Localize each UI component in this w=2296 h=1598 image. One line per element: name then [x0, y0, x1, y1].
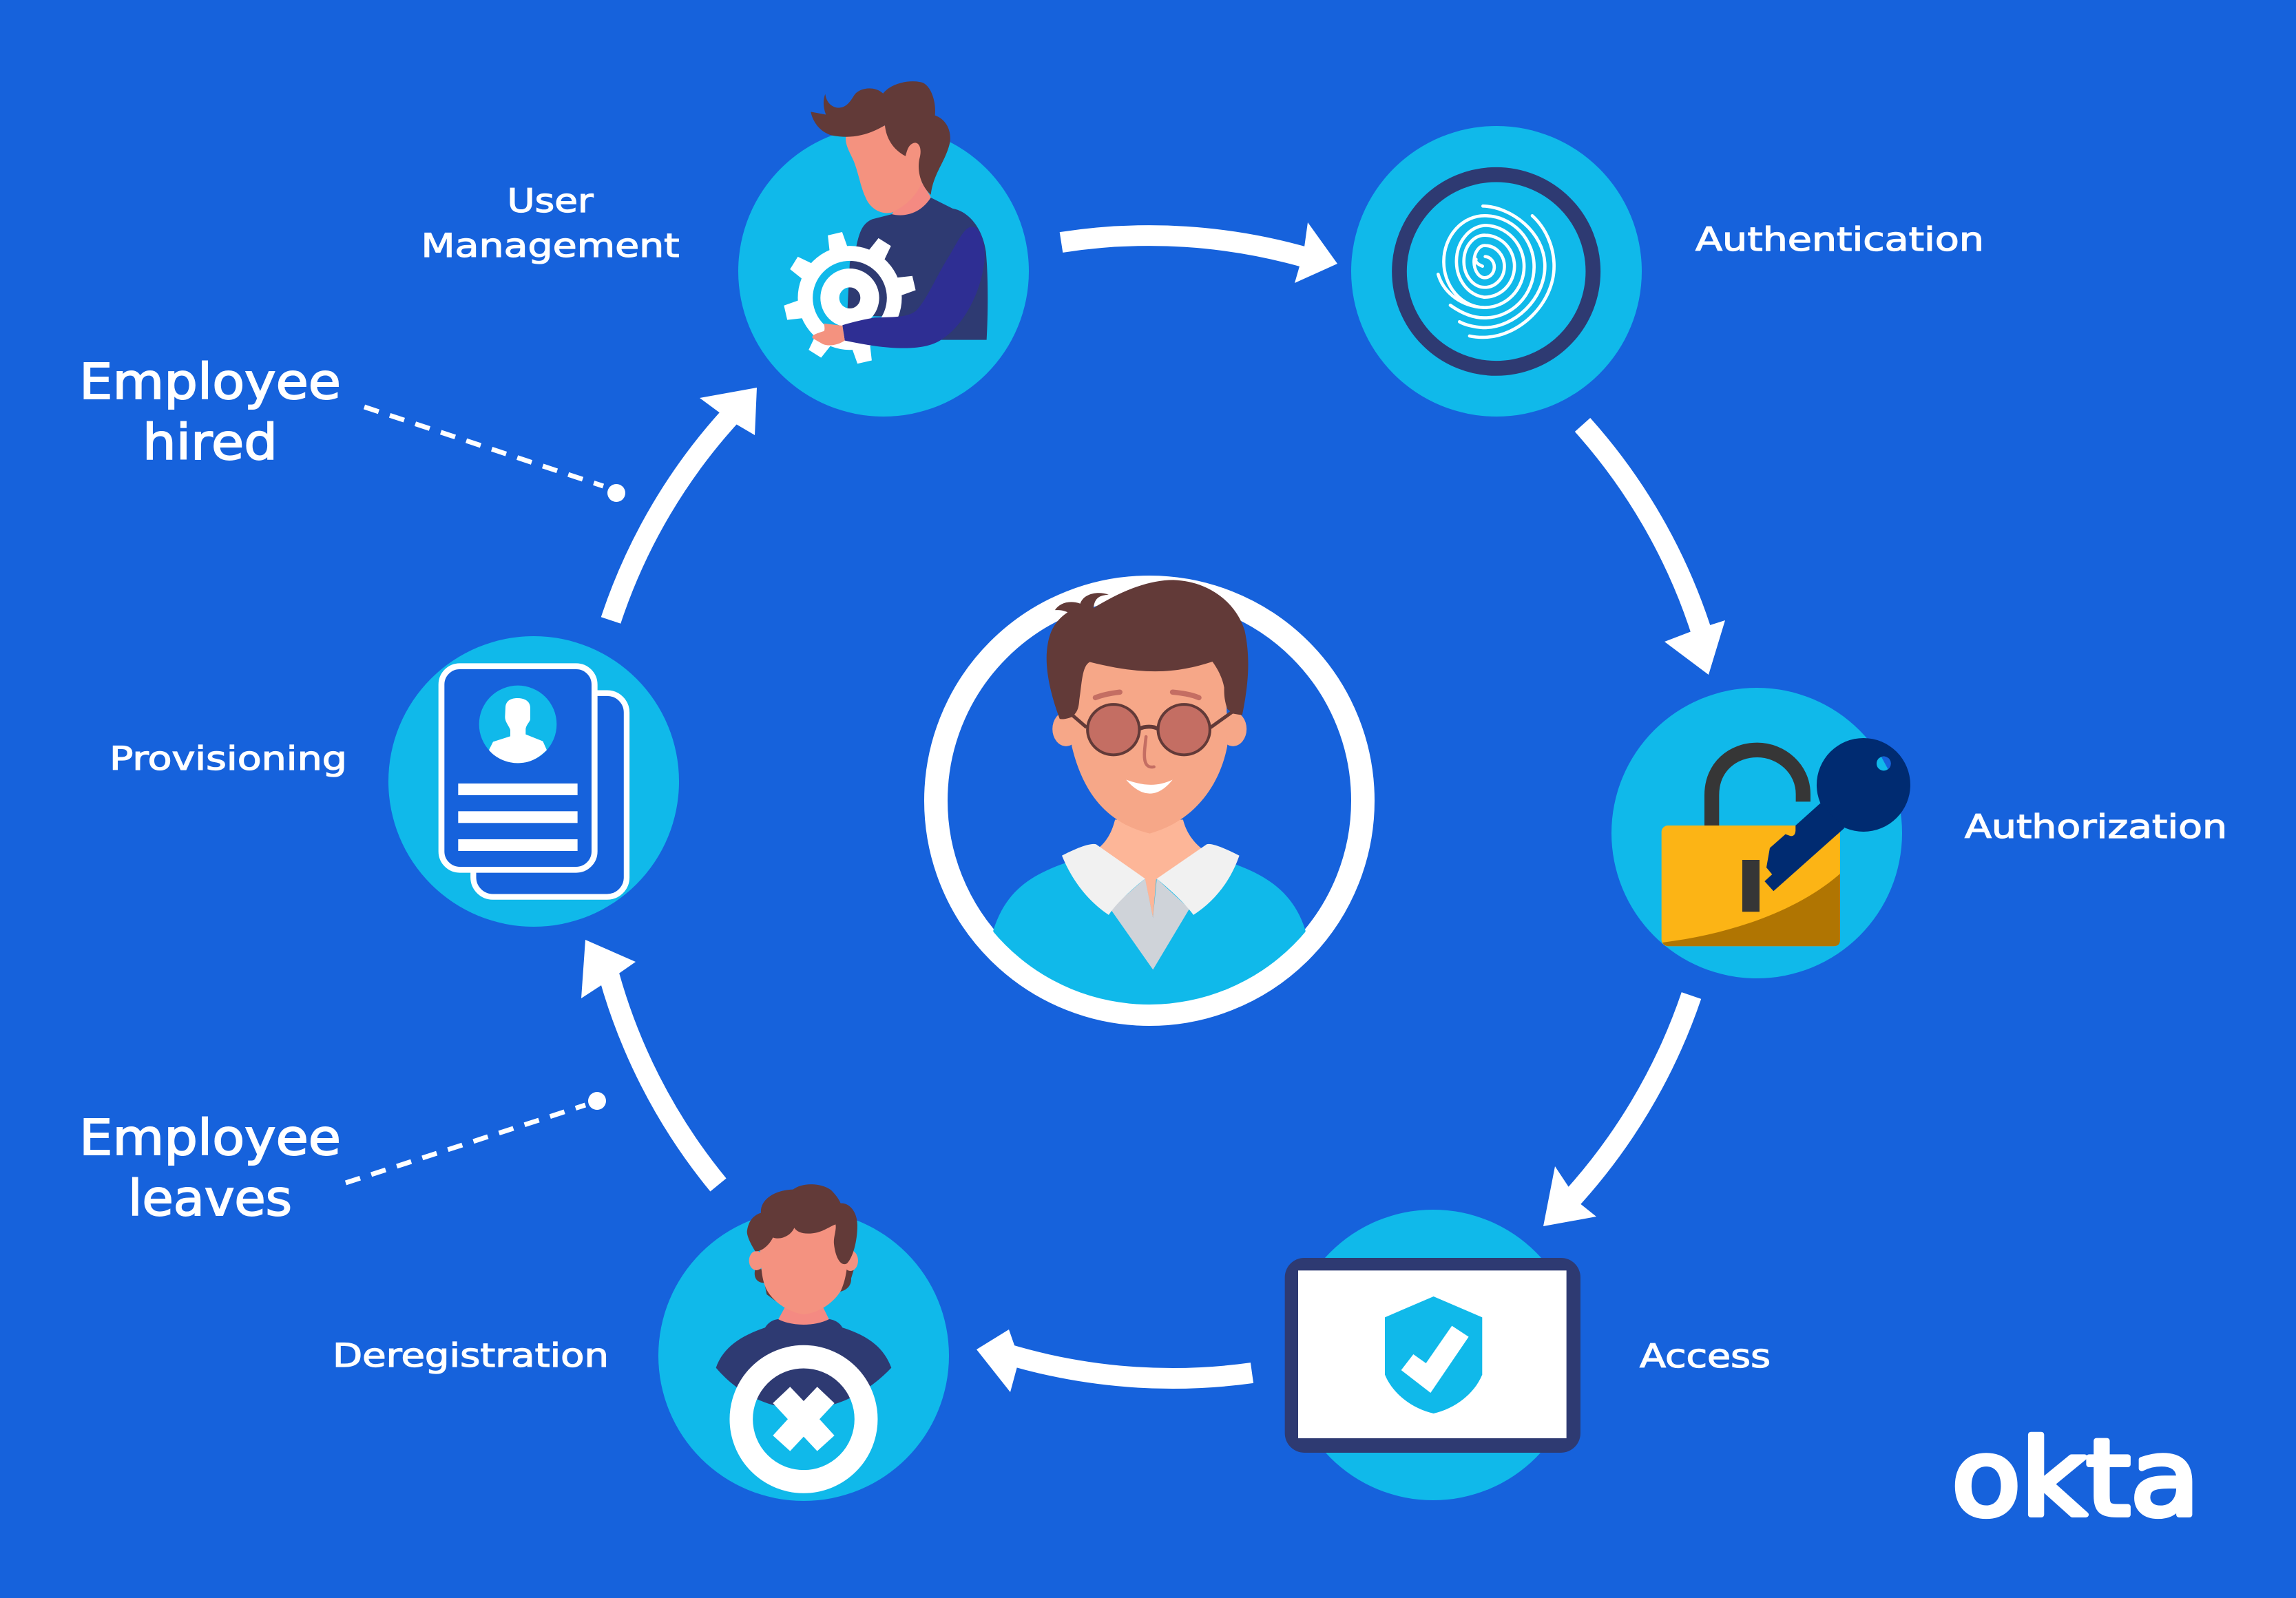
callout text: employee hired: hired [143, 414, 278, 471]
callout text: employee hired: Employee [79, 353, 341, 410]
icon: person holding gear [784, 81, 988, 364]
node: authentication [1351, 126, 1642, 417]
head and collar [1047, 580, 1248, 969]
callout text: employee leaves: leaves [128, 1170, 292, 1227]
icon: screen with shield [1285, 1258, 1580, 1453]
label: deregistration: Deregistration [333, 1337, 609, 1375]
circle [658, 1210, 949, 1501]
callout text: employee leaves: Employee [79, 1109, 341, 1166]
circle [738, 126, 1029, 417]
node: user management [738, 81, 1029, 417]
arrow: provisioning to user management [611, 388, 757, 620]
icon: fingerprint [1399, 175, 1593, 368]
label: user management [421, 182, 679, 265]
callout text: employee leaves [79, 1109, 341, 1227]
node: provisioning [388, 636, 679, 927]
icon: profile documents [441, 666, 627, 897]
arrow: user management to authentication [1061, 222, 1337, 283]
logo: okta: okta [1952, 1418, 2200, 1540]
arrow: access to deregistration [977, 1329, 1252, 1392]
circle [1351, 126, 1642, 417]
label: user management: User [507, 182, 594, 220]
shirt [993, 863, 1306, 1005]
label: authorization: Authorization [1965, 808, 2227, 846]
node: access [1285, 1210, 1580, 1500]
circle [1288, 1210, 1578, 1500]
label: access: Access [1640, 1338, 1771, 1376]
central user portrait [936, 580, 1363, 1026]
arrow: authentication to authorization [1583, 425, 1725, 675]
circle [388, 636, 679, 927]
label: provisioning: Provisioning [109, 740, 347, 778]
circle [1611, 688, 1902, 978]
node: deregistration [658, 1184, 949, 1501]
callout: employee leaves connector [346, 1092, 606, 1183]
icon: padlock and key [1662, 738, 1910, 946]
arrow: authorization to access [1543, 996, 1691, 1226]
ring [936, 587, 1363, 1014]
callout text: employee hired [79, 353, 341, 471]
icon: person with cross [716, 1184, 891, 1482]
label: user management: Management [421, 227, 679, 265]
arrow: deregistration to provisioning [581, 940, 718, 1185]
gear [784, 231, 916, 364]
callout: employee hired connector [364, 407, 625, 502]
label: authentication: Authentication [1695, 221, 1984, 259]
node: authorization [1611, 688, 1910, 978]
